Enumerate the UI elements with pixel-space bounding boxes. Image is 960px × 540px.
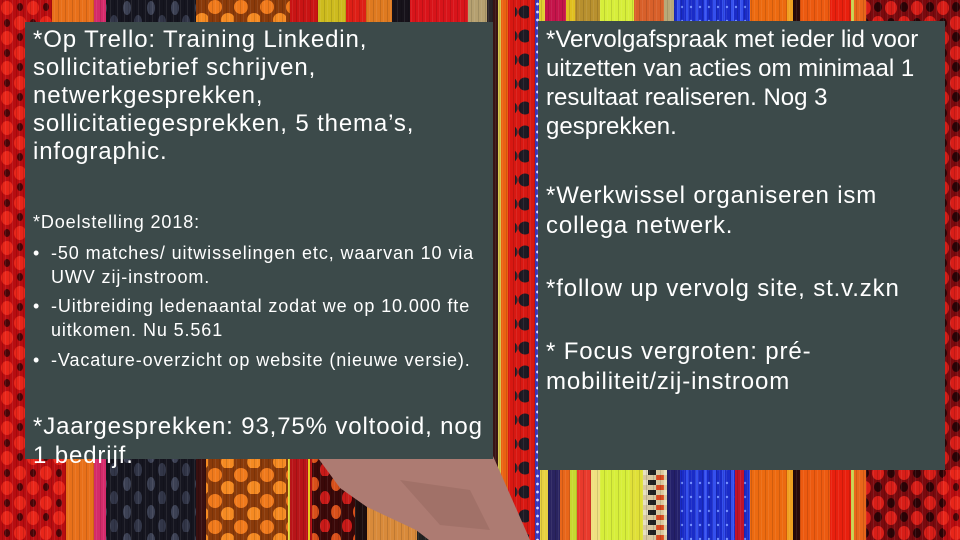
upper threads above right panel	[539, 0, 545, 22]
text block: Doelstelling 2018: UWV zij-instroom.	[51, 267, 210, 287]
text block: Werkwissel: collega netwerk.	[546, 212, 733, 239]
text block: Trello training: infographic.	[33, 138, 168, 165]
text block: Vervolgafspraak	[546, 26, 918, 140]
text block: Doelstelling 2018: •	[33, 243, 40, 263]
lower threads below left panel	[290, 459, 312, 540]
text block: Doelstelling 2018: uitkomen. Nu 5.561	[51, 320, 223, 340]
right threads	[750, 0, 787, 540]
text block: follow up: *follow up vervolg site, st.v.zkn	[546, 275, 900, 302]
text block: Focus vergroten: * Focus vergroten: pré-	[546, 338, 811, 365]
central threads	[493, 0, 498, 540]
text block: Vervolgafspraak: gesprekken.	[546, 113, 677, 140]
text block: Trello training: sollicitatiebrief schrijven,	[33, 54, 316, 81]
text block: Trello training: sollicitatiegesprekken, 5 thema’s,	[33, 110, 414, 137]
text block: Doelstelling 2018: -Uitbreiding ledenaantal zodat we op 10.000 fte	[51, 296, 470, 316]
icon: hand	[318, 456, 530, 540]
text block: Focus vergroten	[546, 338, 811, 395]
panel: left text background	[25, 22, 493, 459]
upper threads above left panel	[290, 0, 318, 22]
text block: Doelstelling 2018	[33, 212, 474, 370]
text block: Trello training: netwerkgesprekken,	[33, 82, 263, 109]
text block: Trello training	[33, 26, 414, 165]
panel: right text background	[538, 21, 945, 470]
text block: Vervolgafspraak: *Vervolgafspraak met ieder lid voor	[546, 26, 918, 53]
text block: Doelstelling 2018: •	[33, 296, 40, 316]
text block: Werkwissel: *Werkwissel organiseren ism	[546, 182, 877, 209]
lower threads below right panel	[540, 470, 548, 540]
text block: Jaargesprekken	[33, 413, 483, 469]
text block: Focus vergroten: mobiliteit/zij-instroom	[546, 368, 790, 395]
text block: Werkwissel	[546, 182, 877, 239]
text block: Vervolgafspraak: resultaat realiseren. Nog 3	[546, 84, 827, 111]
text block: Doelstelling 2018: •	[33, 350, 40, 370]
text block: Doelstelling 2018: -50 matches/ uitwisselingen etc, waarvan 10 via	[51, 243, 474, 263]
text block: Trello training: *Op Trello: Training Linkedin,	[33, 26, 367, 53]
text block: Jaargesprekken: 1 bedrijf.	[33, 442, 134, 469]
text block: Doelstelling 2018: *Doelstelling 2018:	[33, 212, 200, 232]
text block: Doelstelling 2018: -Vacature-overzicht op website (nieuwe versie).	[51, 350, 471, 370]
text block: Vervolgafspraak: uitzetten van acties om minimaal 1	[546, 55, 914, 82]
text block: Jaargesprekken: *Jaargesprekken: 93,75% voltooid, nog	[33, 413, 483, 440]
